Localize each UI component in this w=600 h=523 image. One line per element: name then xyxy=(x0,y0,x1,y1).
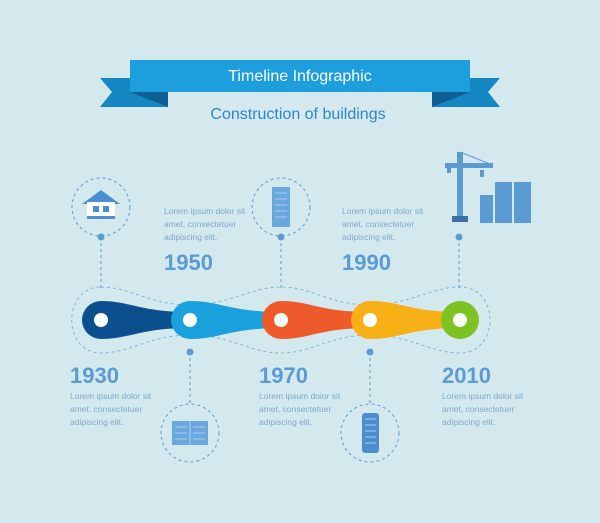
dashed wavy outline xyxy=(72,287,490,353)
icon: tall building xyxy=(272,187,290,227)
ribbon xyxy=(100,60,500,107)
text 2010: adipiscing elit. xyxy=(442,417,495,427)
text 1930: amet, consectetuer xyxy=(70,404,142,414)
text 2010: Lorem ipsum dolor sit xyxy=(442,391,523,401)
timeline nodes xyxy=(82,301,479,339)
text 2010 xyxy=(442,391,524,427)
text 1950: amet, consectetuer xyxy=(164,219,236,229)
icon: wide building xyxy=(172,421,208,445)
text 1970: Lorem ipsum dolor sit xyxy=(259,391,340,401)
text 1970 xyxy=(259,391,340,427)
subtitle: Construction of buildings xyxy=(210,106,386,123)
text 1950: adipiscing elit. xyxy=(164,232,217,242)
text 1990: Lorem ipsum dolor sit xyxy=(342,206,423,216)
text 1970: amet, consectetuer xyxy=(259,404,331,414)
text 1930 xyxy=(70,391,152,427)
text 2010: amet, consectetuer xyxy=(442,404,514,414)
year 1930: 1930 xyxy=(70,363,119,388)
year 1950: 1950 xyxy=(164,250,213,275)
icon: house xyxy=(82,190,120,219)
icon: crane and buildings xyxy=(445,152,531,223)
ribbon: Timeline Infographic xyxy=(228,68,372,85)
text 1950: Lorem ipsum dolor sit xyxy=(164,206,245,216)
text 1930: adipiscing elit. xyxy=(70,417,123,427)
text 1990: adipiscing elit. xyxy=(342,232,395,242)
year 1970: 1970 xyxy=(259,363,308,388)
year 2010: 2010 xyxy=(442,363,491,388)
connectors xyxy=(72,178,459,462)
text 1970: adipiscing elit. xyxy=(259,417,312,427)
text 1930: Lorem ipsum dolor sit xyxy=(70,391,151,401)
text 1990: amet, consectetuer xyxy=(342,219,414,229)
text 1990 xyxy=(342,206,424,242)
icon: skyscraper xyxy=(362,413,379,453)
year 1990: 1990 xyxy=(342,250,391,275)
text 1950 xyxy=(164,206,246,242)
